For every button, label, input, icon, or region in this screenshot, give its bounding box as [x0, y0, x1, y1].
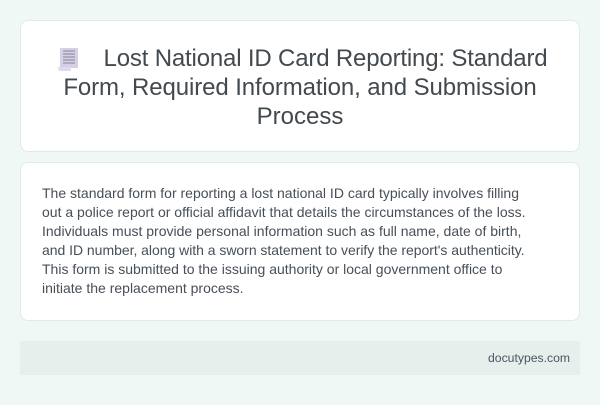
heading: title: Lost National ID Card Reporting: Standard — [104, 45, 547, 72]
panel: description card — [20, 162, 580, 321]
text block: description: The standard form for reporting a lost national ID card typically involves filling — [42, 185, 519, 201]
text block: description: Individuals must provide personal information such as full name, date of birth, — [42, 223, 521, 239]
footer text: docutypes.com — [488, 351, 570, 365]
text block: description: This form is submitted to the issuing authority or local government office to — [42, 261, 502, 277]
text block: description: initiate the replacement process. — [42, 280, 244, 296]
footer bar — [20, 341, 580, 375]
text block: description — [42, 185, 526, 296]
icon: document — [58, 48, 78, 71]
heading: title — [63, 45, 547, 130]
heading: title: Process — [257, 103, 343, 130]
text block: description: and ID number, along with a sworn statement to verify the report's authenticity. — [42, 242, 524, 258]
panel: title card — [20, 20, 580, 152]
text block: description: out a police report or official affidavit that details the circumstances of the loss. — [42, 204, 526, 220]
heading: title: Form, Required Information, and Submission — [63, 74, 537, 101]
